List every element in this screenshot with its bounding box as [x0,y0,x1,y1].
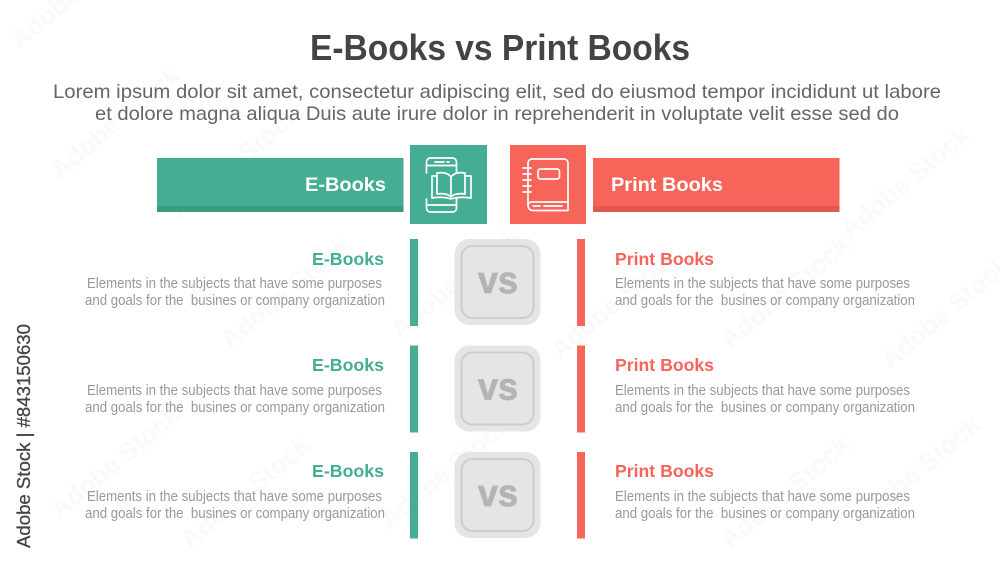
left text block [85,249,385,309]
left text block: and goals for the busines or company organization [85,400,385,416]
vs badge [454,239,540,325]
text: Adobe Stock [715,229,856,355]
subtitle text [53,81,941,125]
text: Adobe Stock [545,239,686,365]
header banner: Print Books [593,158,840,212]
stock id watermark: Adobe Stock | #843150630 [13,324,34,548]
subtitle text: Lorem ipsum dolor sit amet, consectetur adipiscing elit, sed do eiusmod tempor incididunt ut labore [53,81,941,103]
left text block [85,461,385,522]
right text block: Print Books [615,355,714,375]
text: Adobe Stock [45,399,186,525]
row 2 [85,346,915,432]
right text block [615,461,915,522]
right text block: Elements in the subjects that have some purposes [615,489,910,505]
text: Adobe Stock [845,409,986,535]
left text block: and goals for the busines or company organization [85,506,385,522]
right text block: Elements in the subjects that have some purposes [615,383,910,399]
text: Adobe Stock [45,59,186,185]
vs badge [454,452,540,538]
left text block: Elements in the subjects that have some purposes [87,276,382,292]
text: Adobe Stock [715,429,856,555]
header banner: Print Books: Print Books [611,174,723,196]
right text block: and goals for the busines or company organization [615,506,915,522]
vs badge: vs [478,366,518,408]
red divider [577,346,585,432]
text: Adobe Stock [215,229,356,355]
text: Adobe Stock [375,409,516,535]
text: Adobe Stock [175,429,316,555]
green divider [410,239,418,326]
text: Adobe Stock [165,99,306,225]
right text block: and goals for the busines or company organization [615,400,915,416]
text: Adobe Stock [385,219,526,345]
text: Adobe Stock [835,119,976,245]
left text block: Elements in the subjects that have some purposes [87,383,382,399]
right text block: and goals for the busines or company organization [615,293,915,309]
left text block: E-Books [312,249,384,269]
left text block: Elements in the subjects that have some purposes [87,489,382,505]
row 3 [85,452,915,538]
red divider [577,452,585,538]
right text block: Elements in the subjects that have some purposes [615,276,910,292]
left text block: E-Books [312,355,384,375]
title: E-Books vs Print Books [310,27,690,68]
icon: spiral notebook [510,145,586,224]
header banner: E-Books: E-Books [305,174,386,196]
vs badge [454,346,540,432]
vs badge: vs [478,473,518,515]
left text block: and goals for the busines or company organization [85,293,385,309]
header banner: E-Books [157,158,404,212]
subtitle text: et dolore magna aliqua Duis aute irure dolor in reprehenderit in voluptate velit esse sed do [95,103,899,125]
right text block: Print Books [615,249,714,269]
icon: phone with open book [410,145,487,224]
green divider [410,452,418,538]
right text block [615,249,915,309]
vs badge: vs [478,260,518,302]
right text block [615,355,915,416]
green divider [410,346,418,432]
left text block: E-Books [312,461,384,481]
row 1 [85,239,915,326]
left text block [85,355,385,416]
right text block: Print Books [615,461,714,481]
red divider [577,239,585,326]
